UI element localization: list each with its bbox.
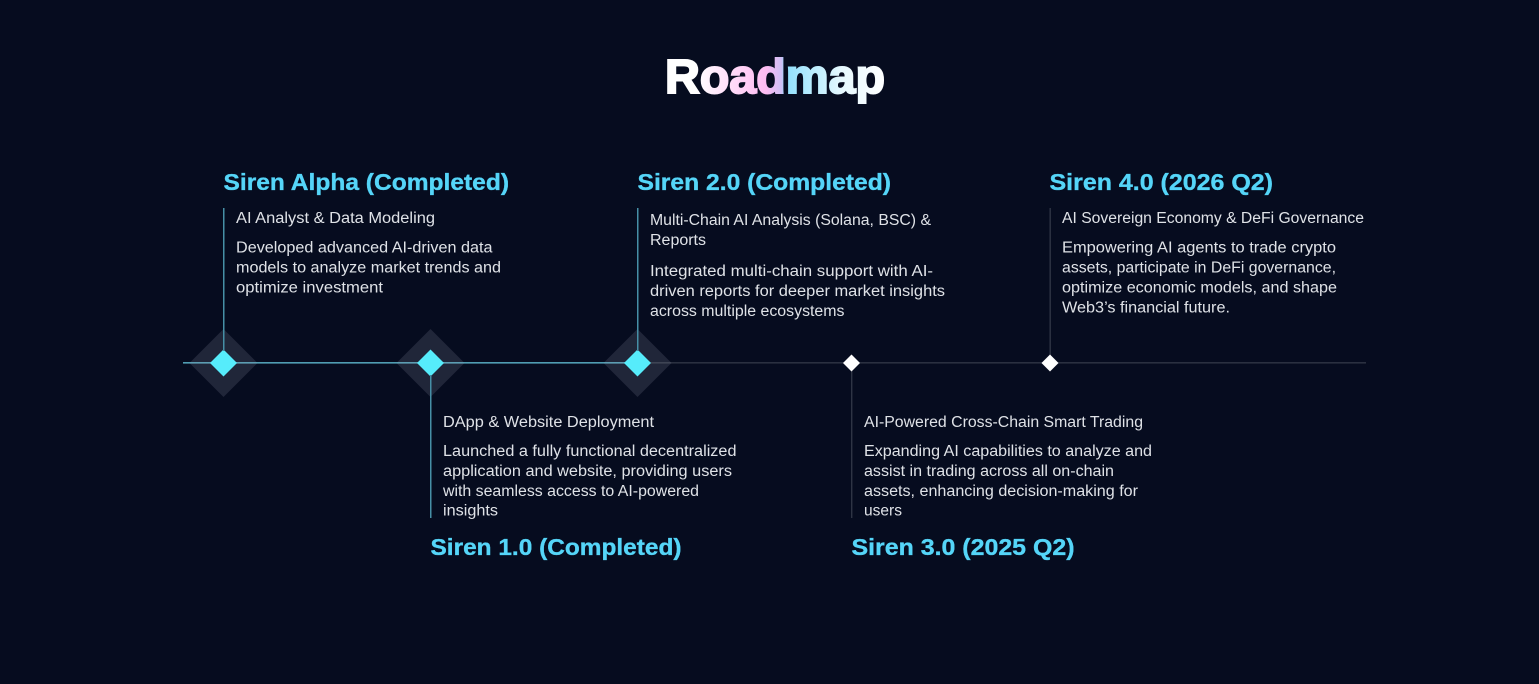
body text: optimize investment xyxy=(236,280,384,296)
connector line xyxy=(430,375,432,518)
body text: with seamless access to AI-powered xyxy=(442,483,699,500)
body text: driven reports for deeper market insights xyxy=(650,283,945,300)
connector line xyxy=(637,208,638,351)
heading: Siren 1.0 (Completed) xyxy=(430,534,682,560)
body text: Web3’s financial future. xyxy=(1062,300,1230,316)
diamond marker xyxy=(190,329,258,397)
milestone: Siren 3.0 xyxy=(843,354,1152,560)
body text: Launched a fully functional decentralized xyxy=(443,443,736,460)
body text: Expanding AI capabilities to analyze and xyxy=(864,443,1152,460)
body text: Empowering AI agents to trade crypto xyxy=(1062,240,1336,256)
body text: assets, enhancing decision-making for xyxy=(864,483,1138,500)
body text: users xyxy=(864,502,902,520)
body text: AI-Powered Cross-Chain Smart Trading xyxy=(864,414,1143,431)
body text: Developed advanced AI-driven data xyxy=(236,240,493,256)
connector line xyxy=(851,363,852,518)
body text: Reports xyxy=(650,232,706,249)
diamond marker xyxy=(396,329,464,397)
heading: Siren 2.0 (Completed) xyxy=(638,169,891,195)
heading: Siren 4.0 (2026 Q2) xyxy=(1050,169,1273,195)
body text: across multiple ecosystems xyxy=(650,303,845,320)
body text: models to analyze market trends and xyxy=(236,260,501,276)
timeline xyxy=(183,362,1366,364)
connector line xyxy=(223,208,224,351)
body text xyxy=(236,210,501,296)
body text: insights xyxy=(443,502,498,520)
body text: DApp & Website Deployment xyxy=(443,414,655,431)
heading: Siren Alpha (Completed) xyxy=(224,169,509,195)
heading: Siren 3.0 (2025 Q2) xyxy=(852,534,1074,560)
body text xyxy=(442,414,736,520)
body text: Integrated multi-chain support with AI- xyxy=(650,263,933,280)
diamond marker xyxy=(1042,354,1058,372)
body text: AI Sovereign Economy & DeFi Governance xyxy=(1062,210,1364,227)
body text xyxy=(1062,210,1364,316)
body text: application and website, providing users xyxy=(443,463,732,480)
body text: assets, participate in DeFi governance, xyxy=(1062,260,1336,276)
milestone: Siren 1.0 xyxy=(396,329,736,560)
body text: AI Analyst & Data Modeling xyxy=(236,210,435,227)
diamond marker xyxy=(604,329,672,397)
body text xyxy=(864,414,1152,520)
milestone: Siren Alpha xyxy=(190,169,509,397)
milestone: Siren 4.0 xyxy=(1042,169,1364,372)
body text xyxy=(650,212,945,320)
diamond marker xyxy=(843,354,860,372)
body text: optimize economic models, and shape xyxy=(1062,280,1337,296)
connector line xyxy=(1050,208,1051,363)
body text: assist in trading across all on-chain xyxy=(864,463,1114,480)
title: Roadmap xyxy=(665,51,885,104)
body text: Multi-Chain AI Analysis (Solana, BSC) & xyxy=(650,212,932,229)
milestone: Siren 2.0 xyxy=(604,169,945,397)
